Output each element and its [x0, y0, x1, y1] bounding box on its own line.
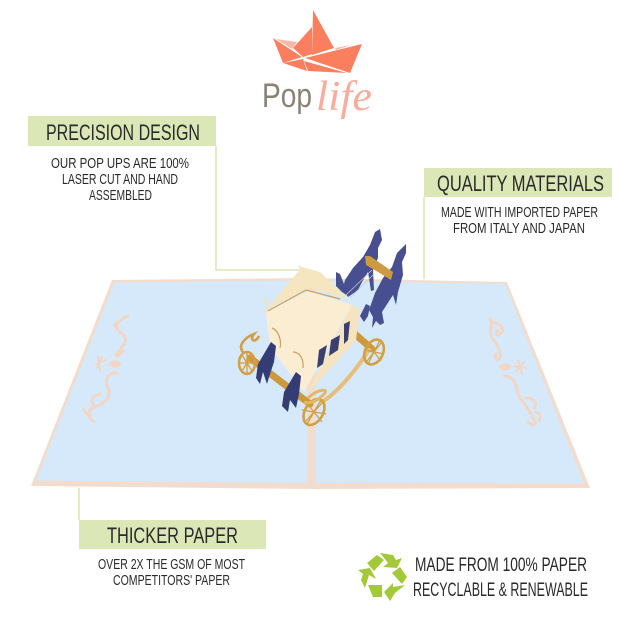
body text: FROM ITALY AND JAPAN: [453, 221, 585, 237]
axles and rail: [250, 334, 372, 404]
heading: [28, 116, 216, 146]
carriage roof: [266, 267, 349, 310]
body text: ASSEMBLED: [89, 188, 152, 204]
windows: [317, 321, 350, 368]
logo: Pop Life: Pop: [262, 77, 312, 115]
horses: [336, 229, 406, 328]
card: right blue panel: [316, 280, 584, 484]
icon: recycle: [358, 553, 407, 601]
body text: [51, 156, 189, 204]
yoke: [365, 256, 393, 280]
wheels: [239, 334, 388, 429]
body text: OVER 2X THE GSM OF MOST: [98, 557, 245, 573]
callout: precision design: [28, 116, 216, 204]
connector lines: [79, 146, 424, 520]
logo: Pop Life: life: [316, 74, 372, 120]
reins: [345, 270, 374, 298]
card: pink backing: [31, 278, 590, 489]
callout: quality materials: [424, 168, 612, 237]
carriage ornaments: [264, 266, 340, 368]
heading: [79, 520, 266, 549]
heading: THICKER PAPER: [107, 523, 238, 548]
ornament: right: [490, 319, 540, 425]
recycling text: [413, 555, 588, 601]
footmen silhouettes: [256, 342, 301, 412]
body text: [98, 557, 245, 589]
logo: Pop Life: [262, 10, 372, 120]
body text: [441, 205, 598, 237]
open pop-up card: [31, 278, 590, 489]
body text: COMPETITORS' PAPER: [113, 573, 230, 589]
callout: thicker paper: [79, 520, 266, 589]
ornament: left: [84, 316, 128, 421]
heading: PRECISION DESIGN: [46, 120, 200, 145]
carriage illustration: [239, 229, 406, 429]
body text: OUR POP UPS ARE 100%: [51, 156, 189, 172]
carriage top face: [266, 291, 352, 392]
carriage side face: [307, 305, 360, 394]
body text: LASER CUT AND HAND: [62, 172, 178, 188]
card: left blue panel: [36, 280, 308, 483]
